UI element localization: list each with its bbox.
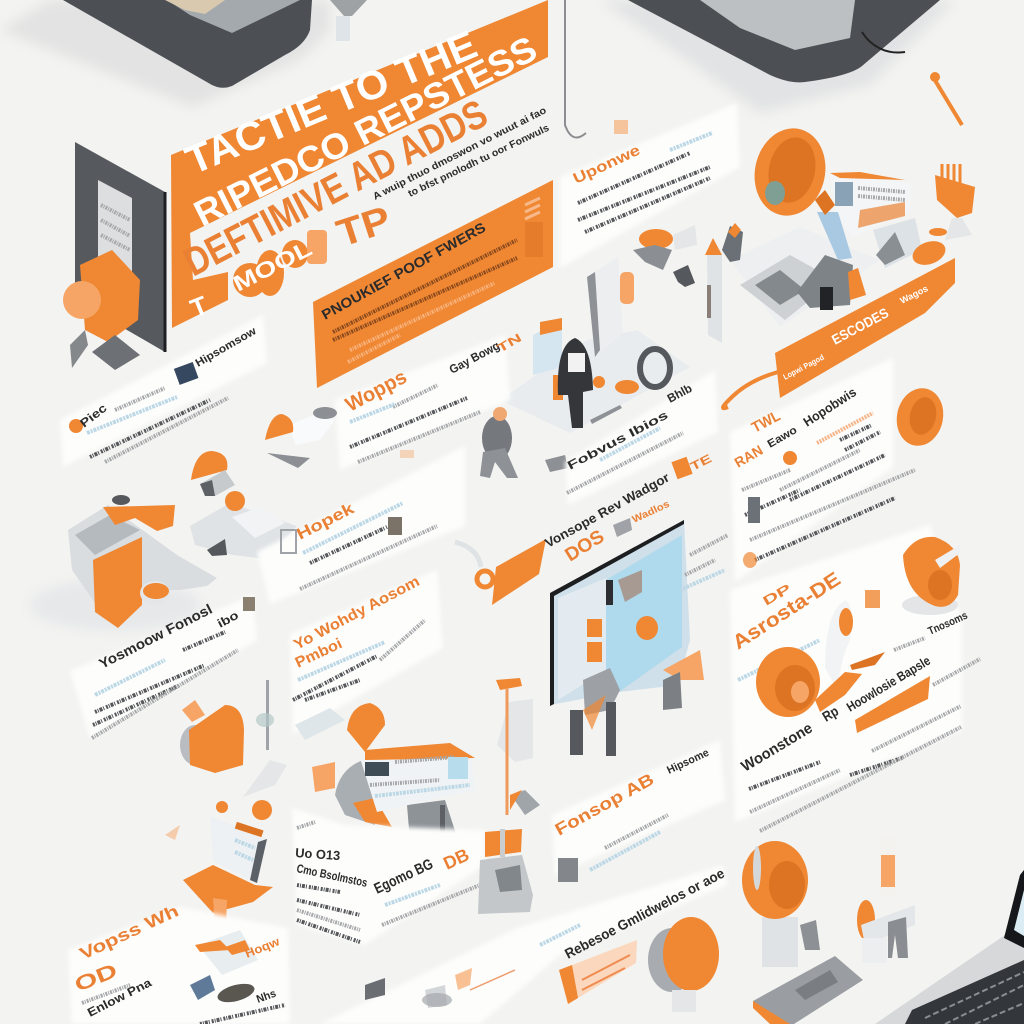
text panel: top right: Uponwe [571,142,643,188]
text panel: centre wide lines: Fobvus Ibios [565,407,671,473]
text panel: right big: Rp [819,703,841,725]
text panel: hopek [257,446,465,604]
text panel: right big [729,525,980,831]
scene: orange chair with tablet [165,800,273,924]
scene: orange dome machine [190,451,297,559]
text panel: bottom-left: OD [72,960,121,997]
text panel: wopps: Gay Bowg [447,338,502,377]
text panel: prefix: Hipsomsow [194,325,259,370]
text panel: right column info: Eawo [766,424,799,451]
text panel: bottom centre: Cmo Bsolmstos [295,861,369,890]
ribbon banner: Lopwi Pagod [782,353,826,382]
title side text: to bfst pnolodh tu oor Fonwuls [407,123,551,200]
tablet with orange shield [63,142,165,370]
scene: orange disc on stand [648,917,719,1012]
text panel: prefix: Piec [77,401,110,430]
figure: man at monitor [570,650,704,756]
icon: orange brush [930,72,975,240]
title banner [171,0,548,328]
heading: bottom guidelines [559,865,727,1004]
text panel: bottom-left: Hoqw [243,934,282,961]
text panel: wopps [335,330,524,470]
text panel: right big: Hoowlosie Bapsle [844,653,933,715]
figure: orange backpack person [478,829,533,914]
orange mark [614,120,628,134]
ribbon banner [723,258,955,408]
text panel: centre wide lines: Bhlb [665,381,694,406]
text panel: bottom centre: DB [440,845,472,874]
text panel: yosmoow: ibo [215,608,241,631]
text panel: top right [560,103,740,268]
text panel: right big: Woonstone [738,720,816,775]
device: top-left dark tray [0,0,330,107]
text panel: centre wide lines [565,370,718,505]
text panel: right big: DP [760,580,794,609]
text panel: bottom-left [68,901,290,1024]
title banner: MOOL [229,236,316,296]
text panel: right column info [730,358,915,582]
text panel: hopek: Hopek [294,500,357,544]
icon: orange disc [747,122,833,222]
text panel: right column info: TWL [749,407,783,437]
icon: orange cube left [180,700,244,773]
text panel: wopps: TN [494,330,524,356]
subtitle orange banner [313,180,553,388]
stand: orange lamp [496,678,540,815]
title banner: RIPEDCO REPSTESS [187,28,543,234]
scene: person with phone centre [500,257,690,433]
title banner: DEFTIMIVE AD ADDS [177,92,495,285]
heading: centre: Vonsope Rev Wadgor [542,470,672,551]
laptop [875,870,1024,1024]
text panel: lower-centre [290,570,443,740]
text panel: bottom centre: Uo O13 [295,845,341,863]
text panel: fonsop: Hipsome [665,747,711,777]
icon: orange clamp [455,539,546,605]
heading: centre: Wadlos [631,499,672,526]
text panel: bottom centre: Egomo BG [372,856,436,898]
ribbon banner: ESCODES [829,304,891,348]
text panel: bottom-left: Vopss Wh [77,901,182,964]
scene: stand and tall pole [243,680,287,797]
title banner: TP [332,199,396,256]
heading: bottom guidelines: Rebesoe Gmlidwelos or aoe [562,865,727,962]
heading: centre: DOS [562,526,608,566]
title side text: A wuip thuo dmoswon vo wuut ai fao [371,105,548,203]
orange tag: TE [688,451,714,474]
text panel: prefix [60,315,267,467]
icon: orange swirl top-right of panel [902,537,960,615]
text panel: yosmoow: Yosmoow Fonosl [96,601,215,672]
figure: crouching worker [480,407,568,478]
text panel: bottom centre [292,808,485,945]
text panel: bottom-left: Enlow Pna [85,975,154,1020]
icon: big orange swirl [756,590,885,717]
text panel: right column info: Hopobwis [800,384,859,430]
title banner: TACTIE TO THE [179,23,483,183]
text panel: right column info: RAN [732,442,765,471]
ribbon banner: Wagos [898,283,930,306]
device: top-right dark tray [600,0,955,113]
scene: orange swirl on stand [742,841,863,1024]
text panel: fonsop: Fonsop AB [552,770,657,839]
text panel: bottom-left: Nhs [255,988,278,1006]
text panel: yosmoow [70,595,257,738]
text panel: right big: Asrosta-DE [729,568,845,654]
title banner: T [186,290,212,324]
scene: orange machine left [30,495,217,631]
scene: desk workstation top right [633,172,949,343]
icon: hard hat [265,407,337,468]
hook cable [565,0,586,138]
text panel: bottom middle strip [320,865,727,1024]
text panel: lower-centre: Yo Wohdy Aosom [291,573,422,654]
orange tag [671,451,714,479]
text panel: wopps: Wopps [342,366,411,416]
text panel: fonsop [552,740,725,882]
scene: reader with newspaper [312,703,475,842]
text panel: right big: Tnosoms [926,610,970,638]
scene: paper and small figure [857,834,915,963]
icon: funnel stand [330,0,367,41]
subtitle orange banner: PNOUKIEF POOF FWERS [319,219,488,323]
text panel: lower-centre: Pmboi [293,635,345,672]
icon: orange roll right [891,384,949,450]
monitor [550,520,728,706]
